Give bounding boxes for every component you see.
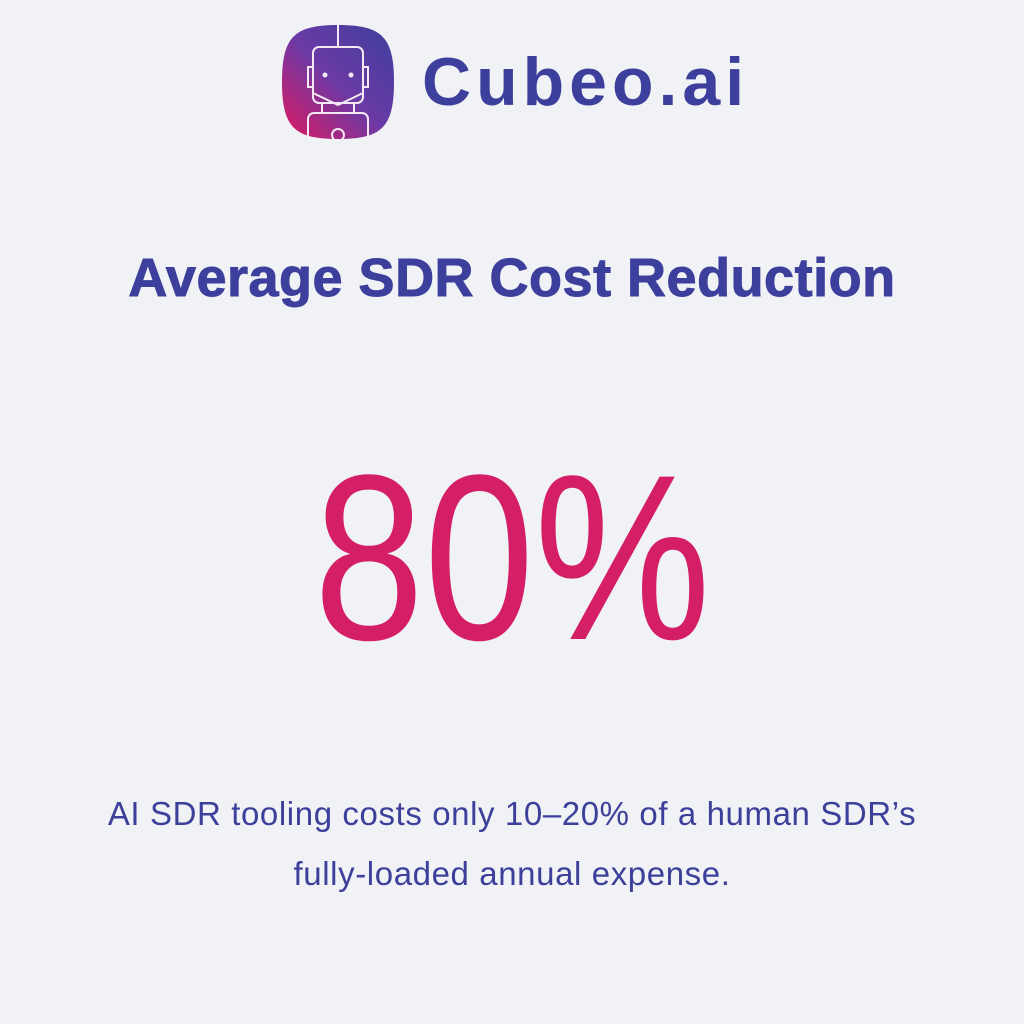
description text bbox=[108, 795, 916, 892]
logo bbox=[282, 25, 749, 139]
title: Average SDR Cost Reduction bbox=[128, 248, 896, 308]
icon: robot bbox=[282, 25, 394, 139]
big stat: 80%: 80% bbox=[314, 426, 710, 690]
brand name: Cubeo.ai bbox=[422, 44, 749, 120]
description text: fully-loaded annual expense. bbox=[294, 855, 730, 892]
description text: AI SDR tooling costs only 10–20% of a human SDR’s bbox=[108, 795, 916, 832]
